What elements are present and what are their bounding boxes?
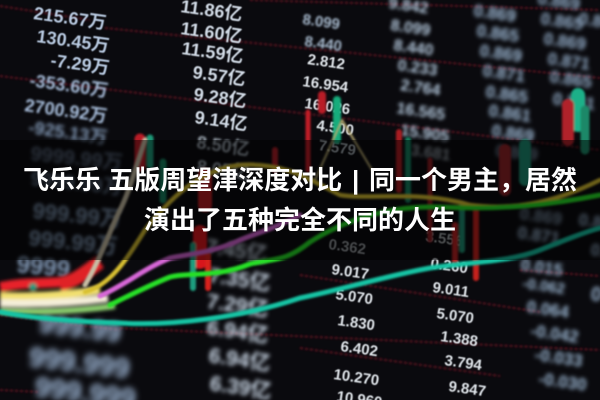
column 5: blurred values: 0.869 xyxy=(495,141,539,164)
column 1: fund flow values: 999.999 xyxy=(27,341,132,384)
column 1: fund flow values: 999.99万 xyxy=(27,225,119,259)
column 5: blurred values: 0.869 xyxy=(490,121,535,146)
title: 演出了五种完全不同的人生 xyxy=(144,205,456,235)
column 1: fund flow values: 9999.99万 xyxy=(29,168,124,200)
column 3: price values: 8.099 xyxy=(301,11,341,33)
column 5: blurred values: 0.015 xyxy=(519,255,564,280)
teal line xyxy=(0,228,600,324)
column 3: price values xyxy=(301,11,383,400)
column 3: price values: 6.402 xyxy=(339,338,379,360)
title xyxy=(23,165,577,235)
column 2: amount values in yi: 11.59亿 xyxy=(180,38,245,67)
column 4: blurred and sharp values: 9.011 xyxy=(431,279,470,301)
column 4: blurred and sharp values: 8.099 xyxy=(389,17,432,40)
column 4: blurred and sharp values: 3.794 xyxy=(443,352,484,374)
column 3: price values: 9.017 xyxy=(330,261,370,283)
column 4: blurred and sharp values: 0.260 xyxy=(429,255,469,277)
column 4: blurred and sharp values: 8.440 xyxy=(392,37,435,60)
column 4: blurred and sharp values: 9.847 xyxy=(447,378,487,400)
column 5: blurred values: 0.869 xyxy=(472,1,517,26)
column 3: price values: 0.362 xyxy=(327,236,367,258)
column 5: blurred values: 0.064 xyxy=(525,297,571,322)
column 2: amount values in yi: 9.14亿 xyxy=(193,107,249,134)
yellow line xyxy=(85,165,600,292)
moving average lines xyxy=(0,120,600,324)
column 4: blurred and sharp values: 1.388 xyxy=(439,328,479,350)
column 4: blurred and sharp values: 2.764 xyxy=(399,77,442,100)
column 1: fund flow values: 999.99万 xyxy=(31,198,123,232)
rainbow line bundle xyxy=(0,262,115,311)
beige line xyxy=(85,120,372,285)
column 3: price values: 8.440 xyxy=(303,33,343,55)
green line xyxy=(110,195,600,305)
column 4: blurred and sharp values: 0.233 xyxy=(396,57,439,80)
column 2: amount values in yi: 7.29亿 xyxy=(205,290,270,322)
column 5: blurred values: 0.871 xyxy=(481,61,526,86)
column 6: blurred values: 0.861 xyxy=(551,89,596,114)
column 5: blurred values: 0.861 xyxy=(487,101,532,126)
column 2: amount values in yi: 8.50亿 xyxy=(195,132,251,159)
column 6: blurred values xyxy=(536,0,600,306)
column 1: fund flow values xyxy=(15,3,138,400)
column 4: blurred and sharp values: 3.681 xyxy=(409,142,452,165)
title: 飞乐乐 五版周望津深度对比 | 同一个男主，居然 xyxy=(23,165,577,195)
column 5: blurred values: 0.871 xyxy=(516,223,561,248)
column 2: amount values in yi: 9.28亿 xyxy=(192,84,248,111)
column 2: amount values in yi: 11.60亿 xyxy=(179,18,244,47)
column 3: price values: 4.500 xyxy=(315,117,355,139)
column 4: blurred and sharp values xyxy=(387,0,487,400)
column 5: blurred values: -0.033 xyxy=(533,345,584,371)
column 1: fund flow values: 999.99 xyxy=(37,308,123,348)
candlesticks xyxy=(140,95,585,288)
column 5: blurred values xyxy=(472,1,588,395)
column 3: price values: 7.579 xyxy=(317,137,357,159)
column 2: amount values in yi xyxy=(179,0,273,400)
column 4: blurred and sharp values: 15.905 xyxy=(399,122,450,146)
column 6: blurred values: 0.869 xyxy=(542,29,587,54)
column 3: price values: 1.830 xyxy=(336,312,376,334)
column 3: price values: 5.070 xyxy=(334,286,374,308)
column 5: blurred values: -0.030 xyxy=(537,369,588,395)
column 5: blurred values: -0.062 xyxy=(521,275,566,298)
column 1: fund flow values: 215.67万 xyxy=(32,3,108,33)
column 2: amount values in yi: 9.57亿 xyxy=(191,62,247,89)
column 5: blurred values: -0.042 xyxy=(529,321,580,347)
column 1: fund flow values: 9999.99万 xyxy=(29,143,124,175)
column 1: fund flow values: 9999 xyxy=(15,251,71,284)
column 1: fund flow values: -353.60万 xyxy=(28,70,110,101)
column 4: blurred and sharp values: 5.070 xyxy=(435,305,475,327)
column 1: fund flow values: 2700.92万 xyxy=(23,95,108,127)
column 5: blurred values: 0.869 xyxy=(478,41,523,66)
column 2: amount values in yi: 7.35亿 xyxy=(207,264,272,296)
column 4: blurred and sharp values: 16.565 xyxy=(395,100,446,124)
column 3: price values: 2.812 xyxy=(306,51,346,73)
column 2: amount values in yi: 6.94亿 xyxy=(205,316,270,348)
column 3: price values: 16.954 xyxy=(301,73,350,96)
column 1: fund flow values: -925.13万 xyxy=(27,117,109,148)
column 2: amount values in yi: 6.94亿 xyxy=(207,344,272,376)
column 2: amount values in yi: 8.05亿 xyxy=(195,156,251,183)
dark title band xyxy=(0,140,600,260)
column 6: blurred values: 0.865 xyxy=(539,9,584,34)
column 4: blurred and sharp values: 3.556 xyxy=(424,228,464,250)
column 3: price values: 10.270 xyxy=(332,366,380,389)
column 5: blurred values: 0.865 xyxy=(484,82,529,107)
column 5: blurred values: 0.869 xyxy=(518,204,563,229)
column 1: fund flow values: 130.45万 xyxy=(35,26,111,56)
column 3: price values: 16.026 xyxy=(303,95,351,118)
column 6: blurred values: 0.871 xyxy=(546,49,591,74)
column 2: amount values in yi: 7.45亿 xyxy=(204,235,269,267)
column 5: blurred values: 0.865 xyxy=(475,21,520,46)
column 6: blurred values: 0.865 xyxy=(548,67,593,92)
magenta line xyxy=(100,215,300,296)
column 1: fund flow values: -7.29万 xyxy=(49,50,111,78)
